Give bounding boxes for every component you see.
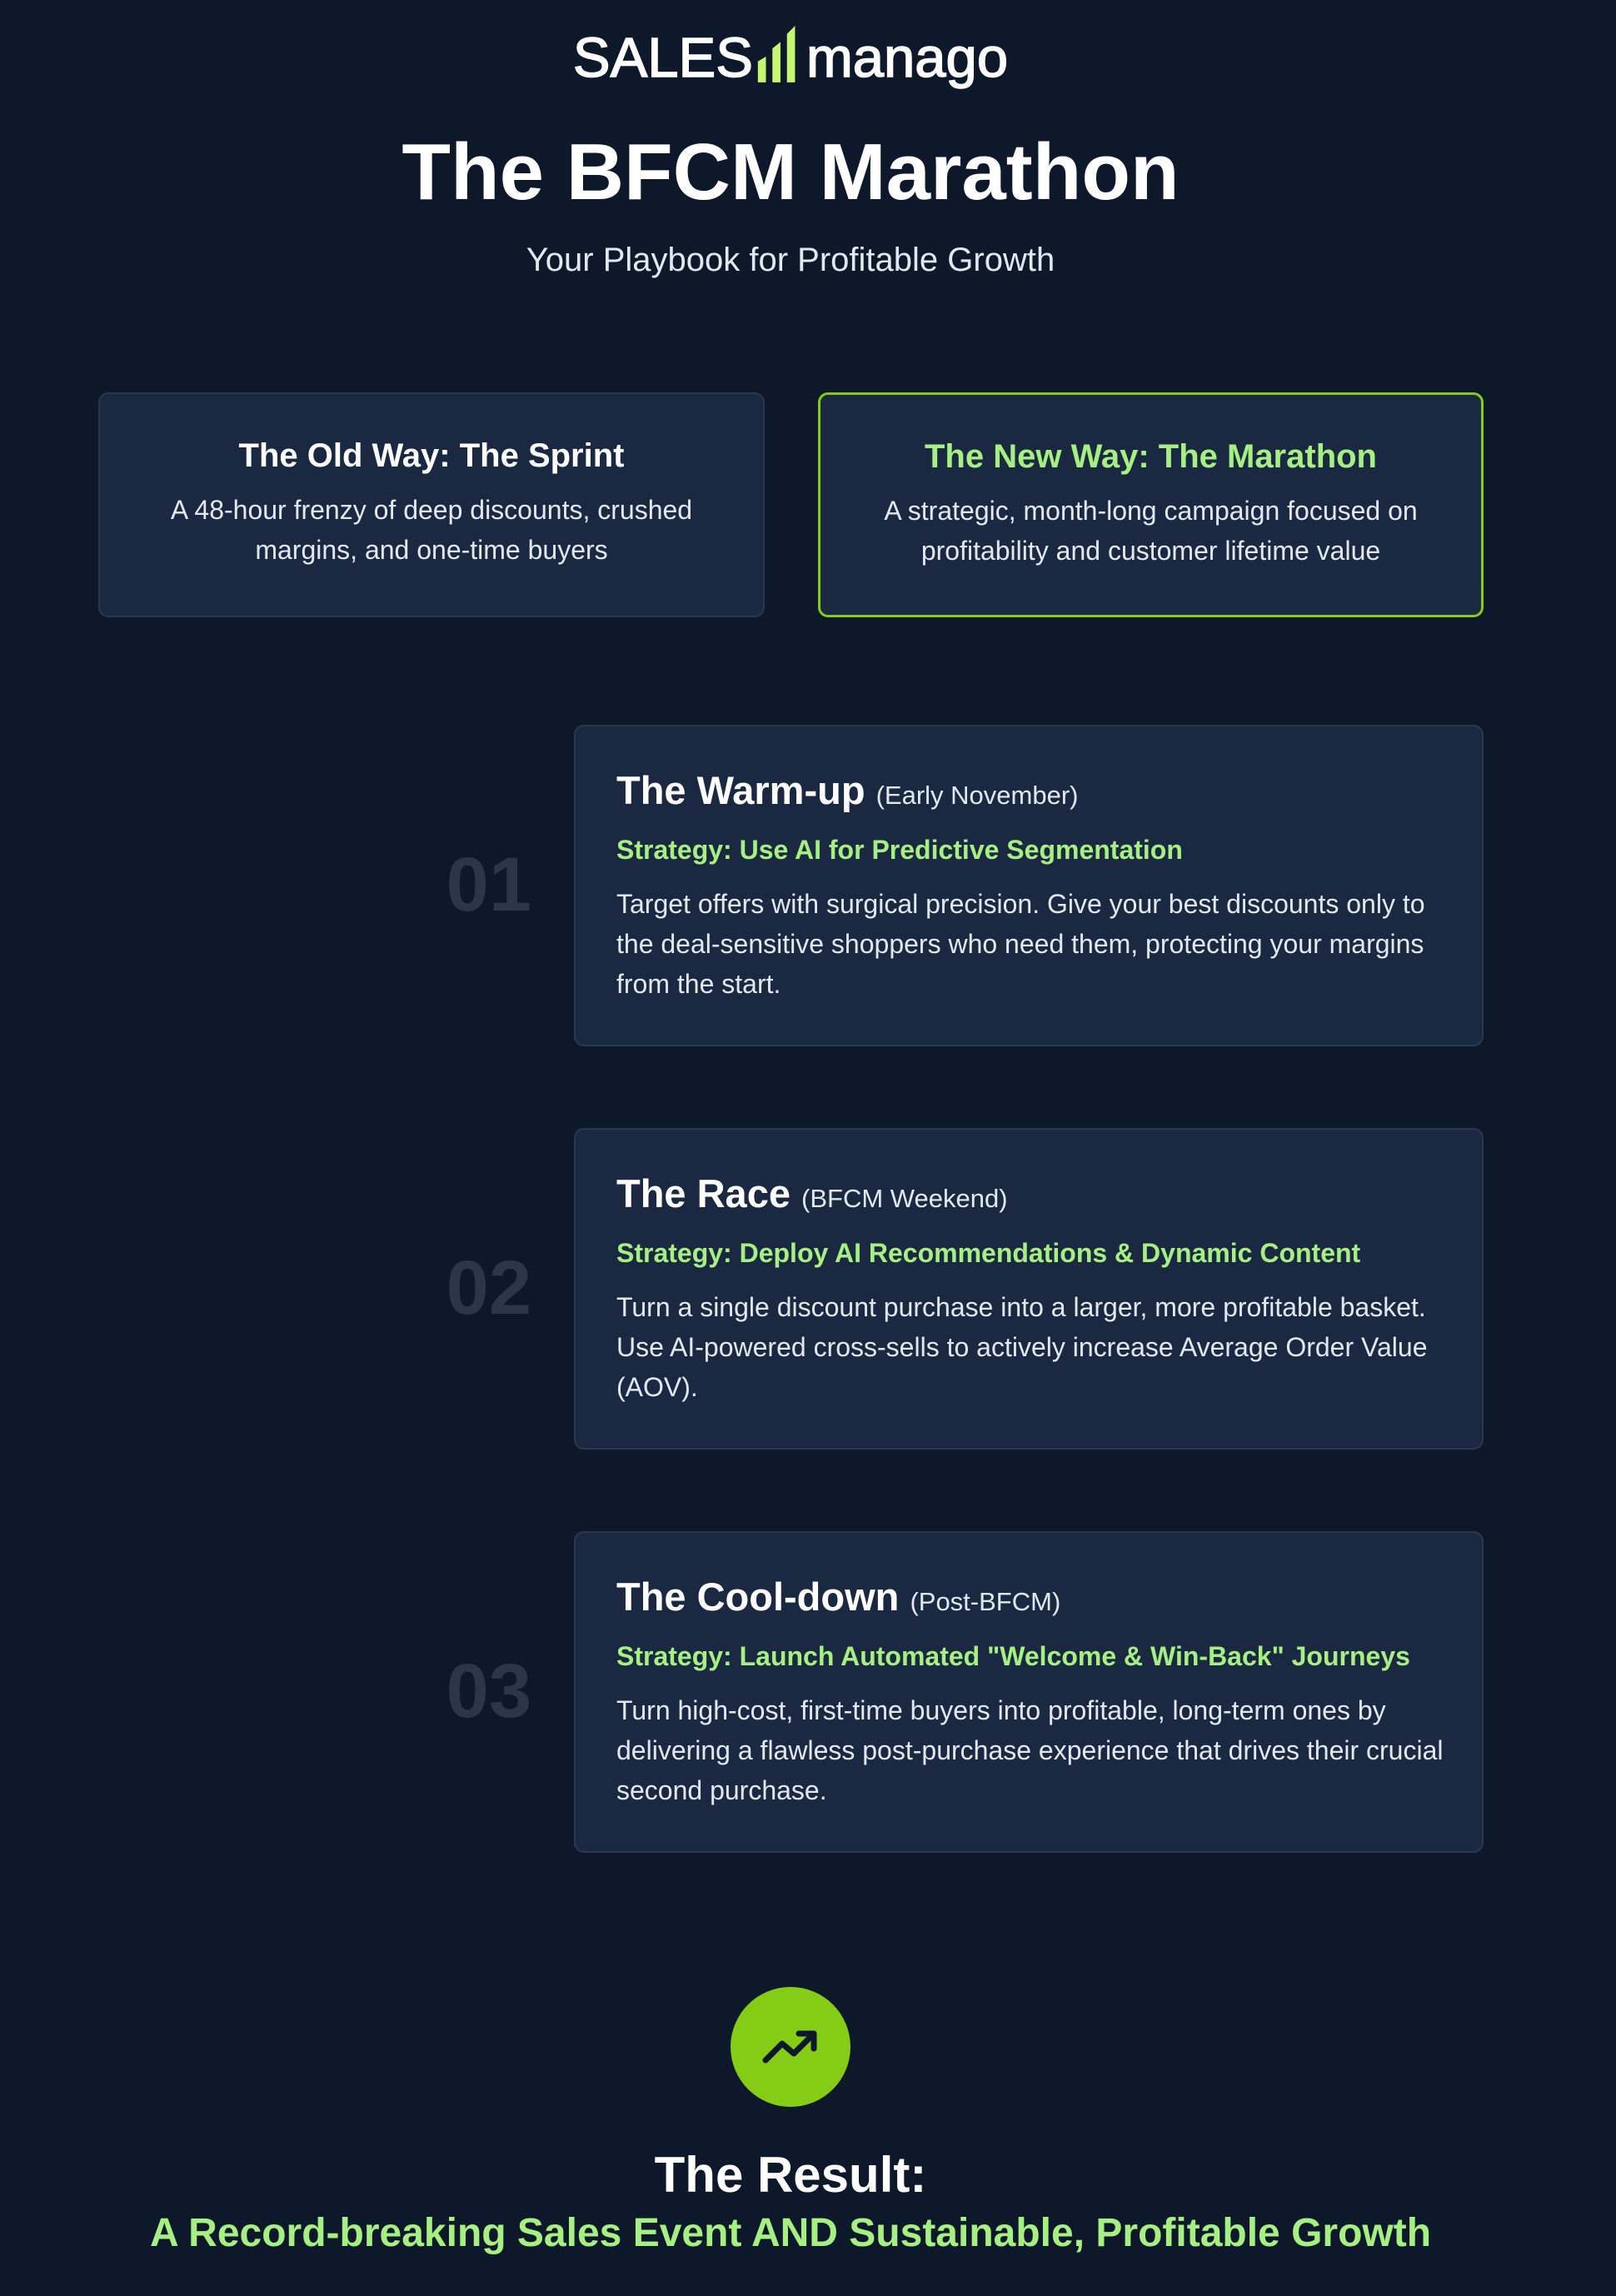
number 01: 01 — [446, 842, 531, 927]
text: new way: profitability and customer lifetime value — [921, 536, 1380, 566]
step 3 heading: The Cool-down (Post-BFCM) — [616, 1575, 1060, 1619]
step 1 text: Target offers with surgical precision. Give your best discounts only to — [616, 889, 1425, 919]
text: new way: A strategic, month-long campaign focused on — [884, 496, 1418, 526]
result text: A Record-breaking Sales Event AND Sustainable, Profitable Growth — [150, 2211, 1431, 2255]
step 1 strategy: Strategy: Use AI for Predictive Segmentation — [616, 835, 1183, 865]
panel: step 1 — [574, 725, 1484, 1046]
icon: trending up — [731, 1987, 850, 2107]
step 3 strategy: Strategy: Launch Automated "Welcome & Win-Back" Journeys — [616, 1641, 1410, 1671]
title: The BFCM Marathon — [402, 127, 1180, 217]
panel: step 2 — [574, 1128, 1484, 1450]
step 2 heading: The Race (BFCM Weekend) — [616, 1171, 1008, 1215]
step 1 heading: The Warm-up (Early November) — [616, 768, 1078, 812]
text: new way — [884, 496, 1418, 566]
text: old way: margins, and one-time buyers — [255, 535, 608, 565]
heading: old way: The Old Way: The Sprint — [239, 437, 624, 474]
text: old way — [171, 495, 692, 565]
step 2 text: (AOV). — [616, 1372, 698, 1402]
step 2 strategy: Strategy: Deploy AI Recommendations & Dynamic Content — [616, 1238, 1360, 1268]
step 1 text: from the start. — [616, 969, 781, 999]
step 1 text — [616, 889, 1425, 999]
step 2 text — [616, 1292, 1427, 1402]
step 2 text: Use AI-powered cross-sells to actively increase Average Order Value — [616, 1332, 1427, 1362]
panel: step 3 — [574, 1531, 1484, 1853]
logo: SALES manago — [573, 27, 1008, 89]
number 03: 03 — [446, 1649, 531, 1734]
step 1 text: the deal-sensitive shoppers who need them, protecting your margins — [616, 929, 1424, 959]
text: old way: A 48-hour frenzy of deep discounts, crushed — [171, 495, 692, 525]
heading: new way: The New Way: The Marathon — [925, 438, 1377, 475]
step 3 text: Turn high-cost, first-time buyers into profitable, long-term ones by — [616, 1695, 1386, 1725]
panel: new way — [818, 392, 1484, 617]
result heading: The Result: — [655, 2147, 926, 2203]
number 02: 02 — [446, 1245, 531, 1330]
subtitle: Your Playbook for Profitable Growth — [526, 242, 1055, 278]
step 3 text: delivering a flawless post-purchase experience that drives their crucial — [616, 1735, 1443, 1765]
step 2 text: Turn a single discount purchase into a larger, more profitable basket. — [616, 1292, 1426, 1322]
panel: old way — [98, 392, 765, 617]
step 3 text: second purchase. — [616, 1775, 827, 1805]
step 3 text — [616, 1695, 1443, 1805]
